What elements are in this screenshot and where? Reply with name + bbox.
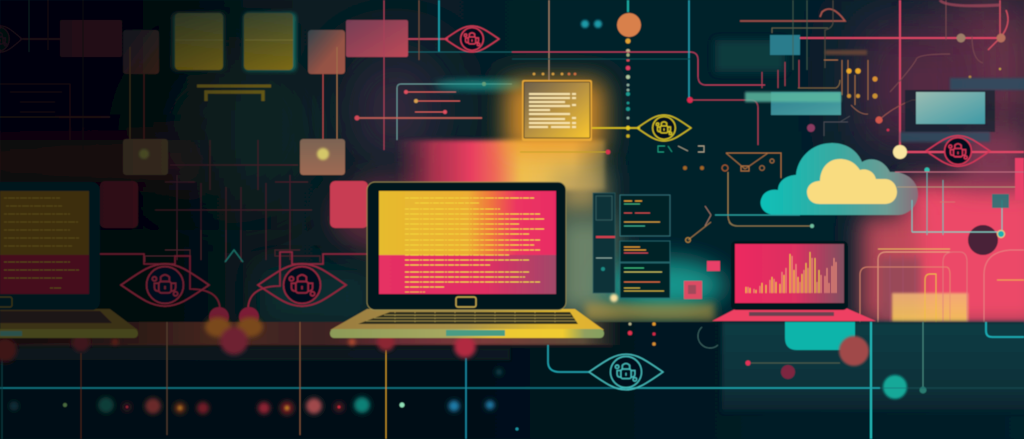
square with dot right xyxy=(300,139,345,175)
camera tab xyxy=(456,297,476,307)
cloud back teal xyxy=(761,143,918,215)
small orange nodes xyxy=(683,165,728,171)
eye: top left cropped xyxy=(0,26,22,52)
red blob xyxy=(839,336,869,366)
laptop: center xyxy=(330,182,604,338)
small table dots xyxy=(516,322,718,430)
laptop: left xyxy=(0,182,138,338)
blue grey smears xyxy=(900,78,1024,142)
block: pink xyxy=(346,20,408,57)
laptop: right with bar chart xyxy=(712,241,876,321)
block: yellow left xyxy=(172,13,224,70)
side panel xyxy=(593,193,615,293)
block: dark red xyxy=(60,20,122,57)
glow dots row xyxy=(0,317,502,415)
pink horizontal bus xyxy=(800,37,1000,39)
lit table strip xyxy=(0,322,620,345)
eye: right large xyxy=(248,252,368,310)
glowing blobs under laptops xyxy=(205,317,476,358)
center lower circuit xyxy=(145,140,320,262)
teal right band xyxy=(722,322,1024,412)
bottom dark teal block xyxy=(785,322,855,350)
yellow glow box xyxy=(892,293,968,322)
tan cable xyxy=(548,0,550,92)
pink chip xyxy=(684,281,702,299)
panel 3 xyxy=(620,263,670,298)
dark disc xyxy=(968,225,998,255)
block: upper right small xyxy=(308,30,345,74)
code text strokes xyxy=(405,198,545,292)
eye: bottom center xyxy=(548,345,795,390)
square with dot left xyxy=(123,139,168,175)
mint smear xyxy=(745,92,841,102)
upper right circuitry xyxy=(700,0,1008,152)
teal glow streak xyxy=(435,80,525,90)
left base xyxy=(0,329,138,338)
left screen xyxy=(0,182,100,310)
panel 2 xyxy=(620,241,670,262)
screen bottom xyxy=(379,255,556,294)
deck xyxy=(712,308,876,321)
bar chart xyxy=(746,252,836,293)
block: upper left small xyxy=(123,30,159,74)
left dimming overlay xyxy=(0,0,300,230)
dots above terminal xyxy=(533,73,576,75)
circuit panel right xyxy=(354,82,512,140)
center terminal window xyxy=(505,0,605,154)
screen bezel xyxy=(367,182,566,310)
bracket xyxy=(197,86,271,101)
pink routed lines xyxy=(512,0,765,154)
right edge pink square xyxy=(1015,158,1024,200)
terminal rows xyxy=(529,94,576,127)
deck xyxy=(330,309,604,330)
panel 1 xyxy=(620,195,670,236)
eye: right with line xyxy=(893,136,1024,166)
dark panel shadow xyxy=(715,40,785,72)
pink main vertical xyxy=(899,0,901,152)
connector nodes xyxy=(209,250,259,327)
branch connector xyxy=(686,206,814,242)
teal tag xyxy=(992,194,1009,208)
teal square xyxy=(770,35,800,55)
neon pipes xyxy=(0,322,1024,439)
blue twin glows xyxy=(581,20,602,28)
block: yellow right xyxy=(244,13,296,71)
glow dot xyxy=(610,294,618,302)
vertical dotted chain with orange ball xyxy=(617,0,641,138)
eye: center with lines xyxy=(592,115,815,141)
red tab left xyxy=(100,181,138,228)
bottom bands xyxy=(0,322,1024,439)
keyboard xyxy=(358,312,578,324)
right lower neon frames xyxy=(860,200,1024,322)
red tab right xyxy=(330,181,368,228)
screen xyxy=(735,244,844,303)
small colored brackets xyxy=(658,146,704,152)
base front xyxy=(330,329,604,338)
left deck xyxy=(0,309,138,330)
pale panel right xyxy=(905,90,995,132)
screen top xyxy=(379,191,556,255)
teal blob xyxy=(883,375,907,399)
left blocks xyxy=(0,0,525,228)
cloud front yellow xyxy=(807,159,897,204)
teal node lines xyxy=(895,167,1024,235)
pink square xyxy=(707,261,720,271)
connectors xyxy=(0,0,512,150)
eye: top center xyxy=(445,26,499,52)
code panels xyxy=(593,193,670,302)
teal panel middle xyxy=(745,92,841,115)
envelope shape xyxy=(726,153,812,226)
left code lines xyxy=(4,198,80,288)
trackpad xyxy=(446,330,505,336)
teal line under cloud xyxy=(715,214,800,216)
bezel xyxy=(731,241,848,310)
eye: left large xyxy=(100,254,220,310)
circuit panel left xyxy=(0,84,70,140)
